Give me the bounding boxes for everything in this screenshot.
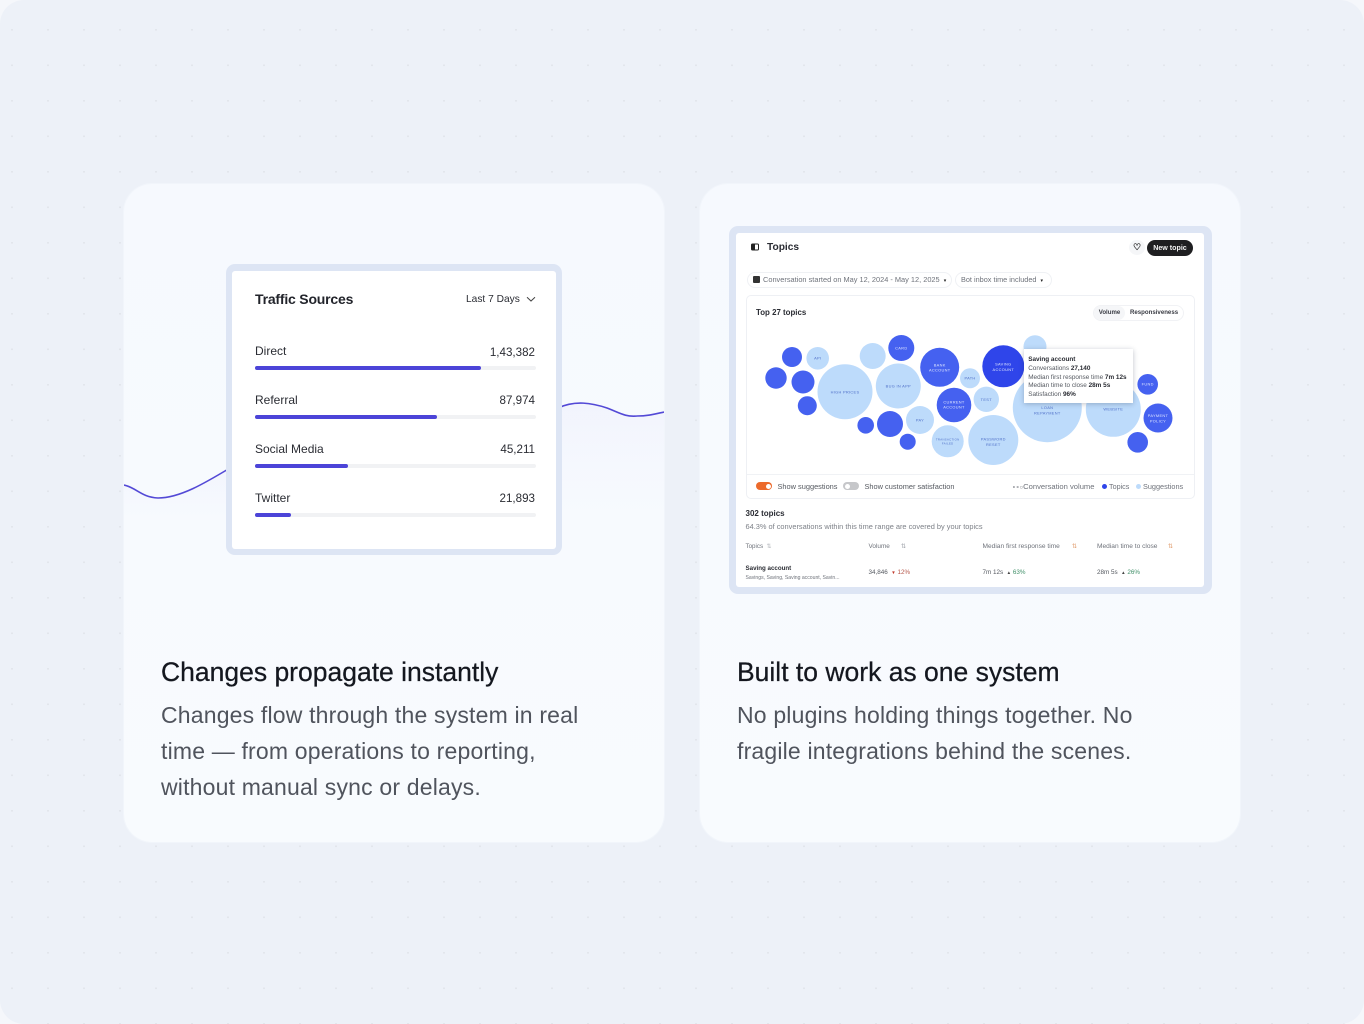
chart: topic bubbles: TEST — [981, 397, 992, 402]
value: referral: 87,974 — [500, 394, 535, 407]
button: new topic: New topic — [1153, 244, 1187, 252]
button: favourite: ♡ — [1133, 242, 1141, 252]
chart: topic bubbles: RESET — [986, 442, 1001, 447]
heading: 302 topics: 302 topics — [746, 508, 785, 518]
bar: referral — [255, 415, 536, 419]
text block: system description — [737, 702, 1133, 764]
chart: topic bubbles: ACCOUNT — [929, 368, 951, 372]
tab: responsiveness: Responsiveness — [1130, 309, 1178, 316]
table header: volume: Volume — [868, 542, 890, 550]
heading: built to work as one system: Built to work as one system — [737, 657, 1060, 687]
divider strip: chart footer — [747, 474, 1194, 475]
bar: social media — [255, 464, 536, 468]
icon: calendar — [753, 276, 760, 283]
sort icon: close time: ⇅ — [1168, 542, 1173, 550]
text block: changes description — [161, 702, 578, 800]
label: social media: Social Media — [255, 442, 324, 456]
heading: top 27 topics: Top 27 topics — [756, 308, 806, 317]
value: social media: 45,211 — [500, 443, 535, 456]
tooltip: saving account: Conversations 27,140 — [1028, 365, 1090, 372]
chart: topic bubbles: API — [814, 356, 821, 360]
filter: conversation date range — [747, 272, 952, 288]
text block: changes description: Changes flow through the system in real — [161, 702, 578, 728]
bar: twitter — [255, 513, 536, 517]
chart: topic bubbles: LOAN — [1041, 405, 1053, 410]
panel: traffic sources widget — [226, 264, 562, 555]
button: new topic — [1147, 240, 1193, 256]
filter: bot inbox: Bot inbox time included ▾ — [961, 274, 1043, 284]
chart: topic bubbles: TRANSACTION — [936, 438, 959, 442]
chart: topic bubbles: REPAYMENT — [1034, 410, 1061, 416]
label: show customer satisfaction: Show customer satisfaction — [864, 482, 954, 490]
filter: bot inbox — [955, 272, 1052, 288]
chart: topic bubbles: HIGH PRICES — [831, 389, 859, 394]
tooltip: saving account: Saving account — [1028, 356, 1075, 363]
icon: sidebar toggle — [751, 244, 759, 250]
chart: topic bubbles: BANK — [934, 362, 946, 368]
table cell: keywords: Savings, Saving, Saving account, Savin... — [746, 575, 840, 581]
text block: changes description: time — from operations to reporting, — [161, 738, 536, 764]
toggle: volume or responsiveness — [1093, 305, 1184, 321]
text block: system description: fragile integrations behind the scenes. — [737, 738, 1131, 764]
text block: system description: No plugins holding things together. No — [737, 702, 1133, 728]
toggle: show suggestions — [756, 482, 772, 490]
chart: topic bubbles: PAYMENT — [1148, 413, 1169, 418]
dashboard surface — [736, 233, 1204, 587]
chart: topic bubbles: PAY — [916, 417, 924, 422]
legend: topics: Topics — [1109, 482, 1129, 490]
legend: suggestions: Suggestions — [1143, 482, 1183, 490]
icon: chevron — [526, 296, 536, 302]
chart: topic bubbles: BUG IN APP — [886, 383, 911, 388]
chart: connecting wave line — [124, 402, 664, 499]
topics dashboard content — [746, 240, 1195, 581]
text: coverage note: 64.3% of conversations within this time range are covered by your topics — [746, 522, 983, 530]
traffic sources content — [255, 291, 536, 517]
chart: topic bubbles: FAILED — [942, 442, 953, 446]
label: referral: Referral — [255, 393, 298, 407]
heading: changes propagate instantly: Changes propagate instantly — [161, 657, 498, 687]
panel: bubble chart container — [746, 295, 1195, 499]
tooltip: saving account — [1024, 349, 1132, 403]
toggle: show customer satisfaction — [843, 482, 859, 490]
panel: changes propagate instantly — [124, 184, 664, 842]
chart: topic bubbles: ACCOUNT — [943, 404, 965, 410]
sort icon: first response: ⇅ — [1072, 542, 1077, 550]
table cell: first response value: 7m 12s ▲ 63% — [982, 569, 1025, 576]
chart: topic bubbles: PATH — [964, 376, 976, 381]
chart: topic bubbles: SAVING — [995, 362, 1011, 366]
button: favourite — [1129, 240, 1145, 255]
chart: topic bubbles: FUND — [1142, 382, 1154, 387]
chart: topic bubbles — [765, 335, 1172, 465]
panel: built to work as one system — [700, 184, 1240, 842]
label: show suggestions: Show suggestions — [778, 482, 837, 490]
title: topics: Topics — [767, 242, 799, 252]
table header: median time to close: Median time to close — [1097, 542, 1157, 550]
dropdown: last 7 days: Last 7 Days — [466, 294, 520, 305]
value: twitter: 21,893 — [500, 492, 535, 505]
tooltip: saving account: Median time to close 28m 5s — [1028, 382, 1110, 389]
legend: conversation volume: ∘∘○Conversation volume — [1012, 482, 1094, 490]
tab: volume: Volume — [1099, 309, 1120, 316]
bar: direct — [255, 366, 536, 370]
panel: topics dashboard frame — [729, 226, 1212, 594]
chart: topic bubbles: ACCOUNT — [993, 367, 1014, 372]
widget inner surface — [232, 271, 556, 549]
table header: topics: Topics ⇅ — [746, 542, 772, 550]
table header: median first response time: Median first response time — [982, 542, 1060, 550]
legend dot: suggestions — [1136, 484, 1141, 489]
chart: topic bubbles: CURRENT — [943, 400, 965, 404]
heading: traffic sources: Traffic Sources — [255, 291, 353, 307]
table cell: volume value: 34,846 ▼ 12% — [868, 569, 910, 576]
table cell: close time value: 28m 5s ▲ 26% — [1097, 569, 1140, 576]
value: direct: 1,43,382 — [490, 346, 535, 358]
tooltip: saving account: Satisfaction 96% — [1028, 391, 1076, 398]
sort icon: volume: ⇅ — [901, 542, 906, 550]
tab: volume — [1094, 306, 1125, 320]
filter: conversation date range: Conversation started on May 12, 2024 - May 12, 2025 ▾ — [763, 274, 946, 284]
chart: topic bubbles: WEBSITE — [1103, 407, 1123, 412]
tooltip: saving account: Median first response time 7m 12s — [1028, 374, 1127, 381]
legend dot: topics — [1102, 484, 1107, 489]
label: direct: Direct — [255, 344, 286, 358]
chart: topic bubbles: CARD — [895, 345, 907, 350]
table cell: saving account: Saving account — [746, 564, 791, 572]
label: twitter: Twitter — [255, 491, 290, 505]
text block: changes description: without manual sync or delays. — [161, 774, 481, 800]
chart: topic bubbles: POLICY — [1150, 418, 1166, 424]
chart: topic bubbles: PASSWORD — [981, 436, 1006, 442]
